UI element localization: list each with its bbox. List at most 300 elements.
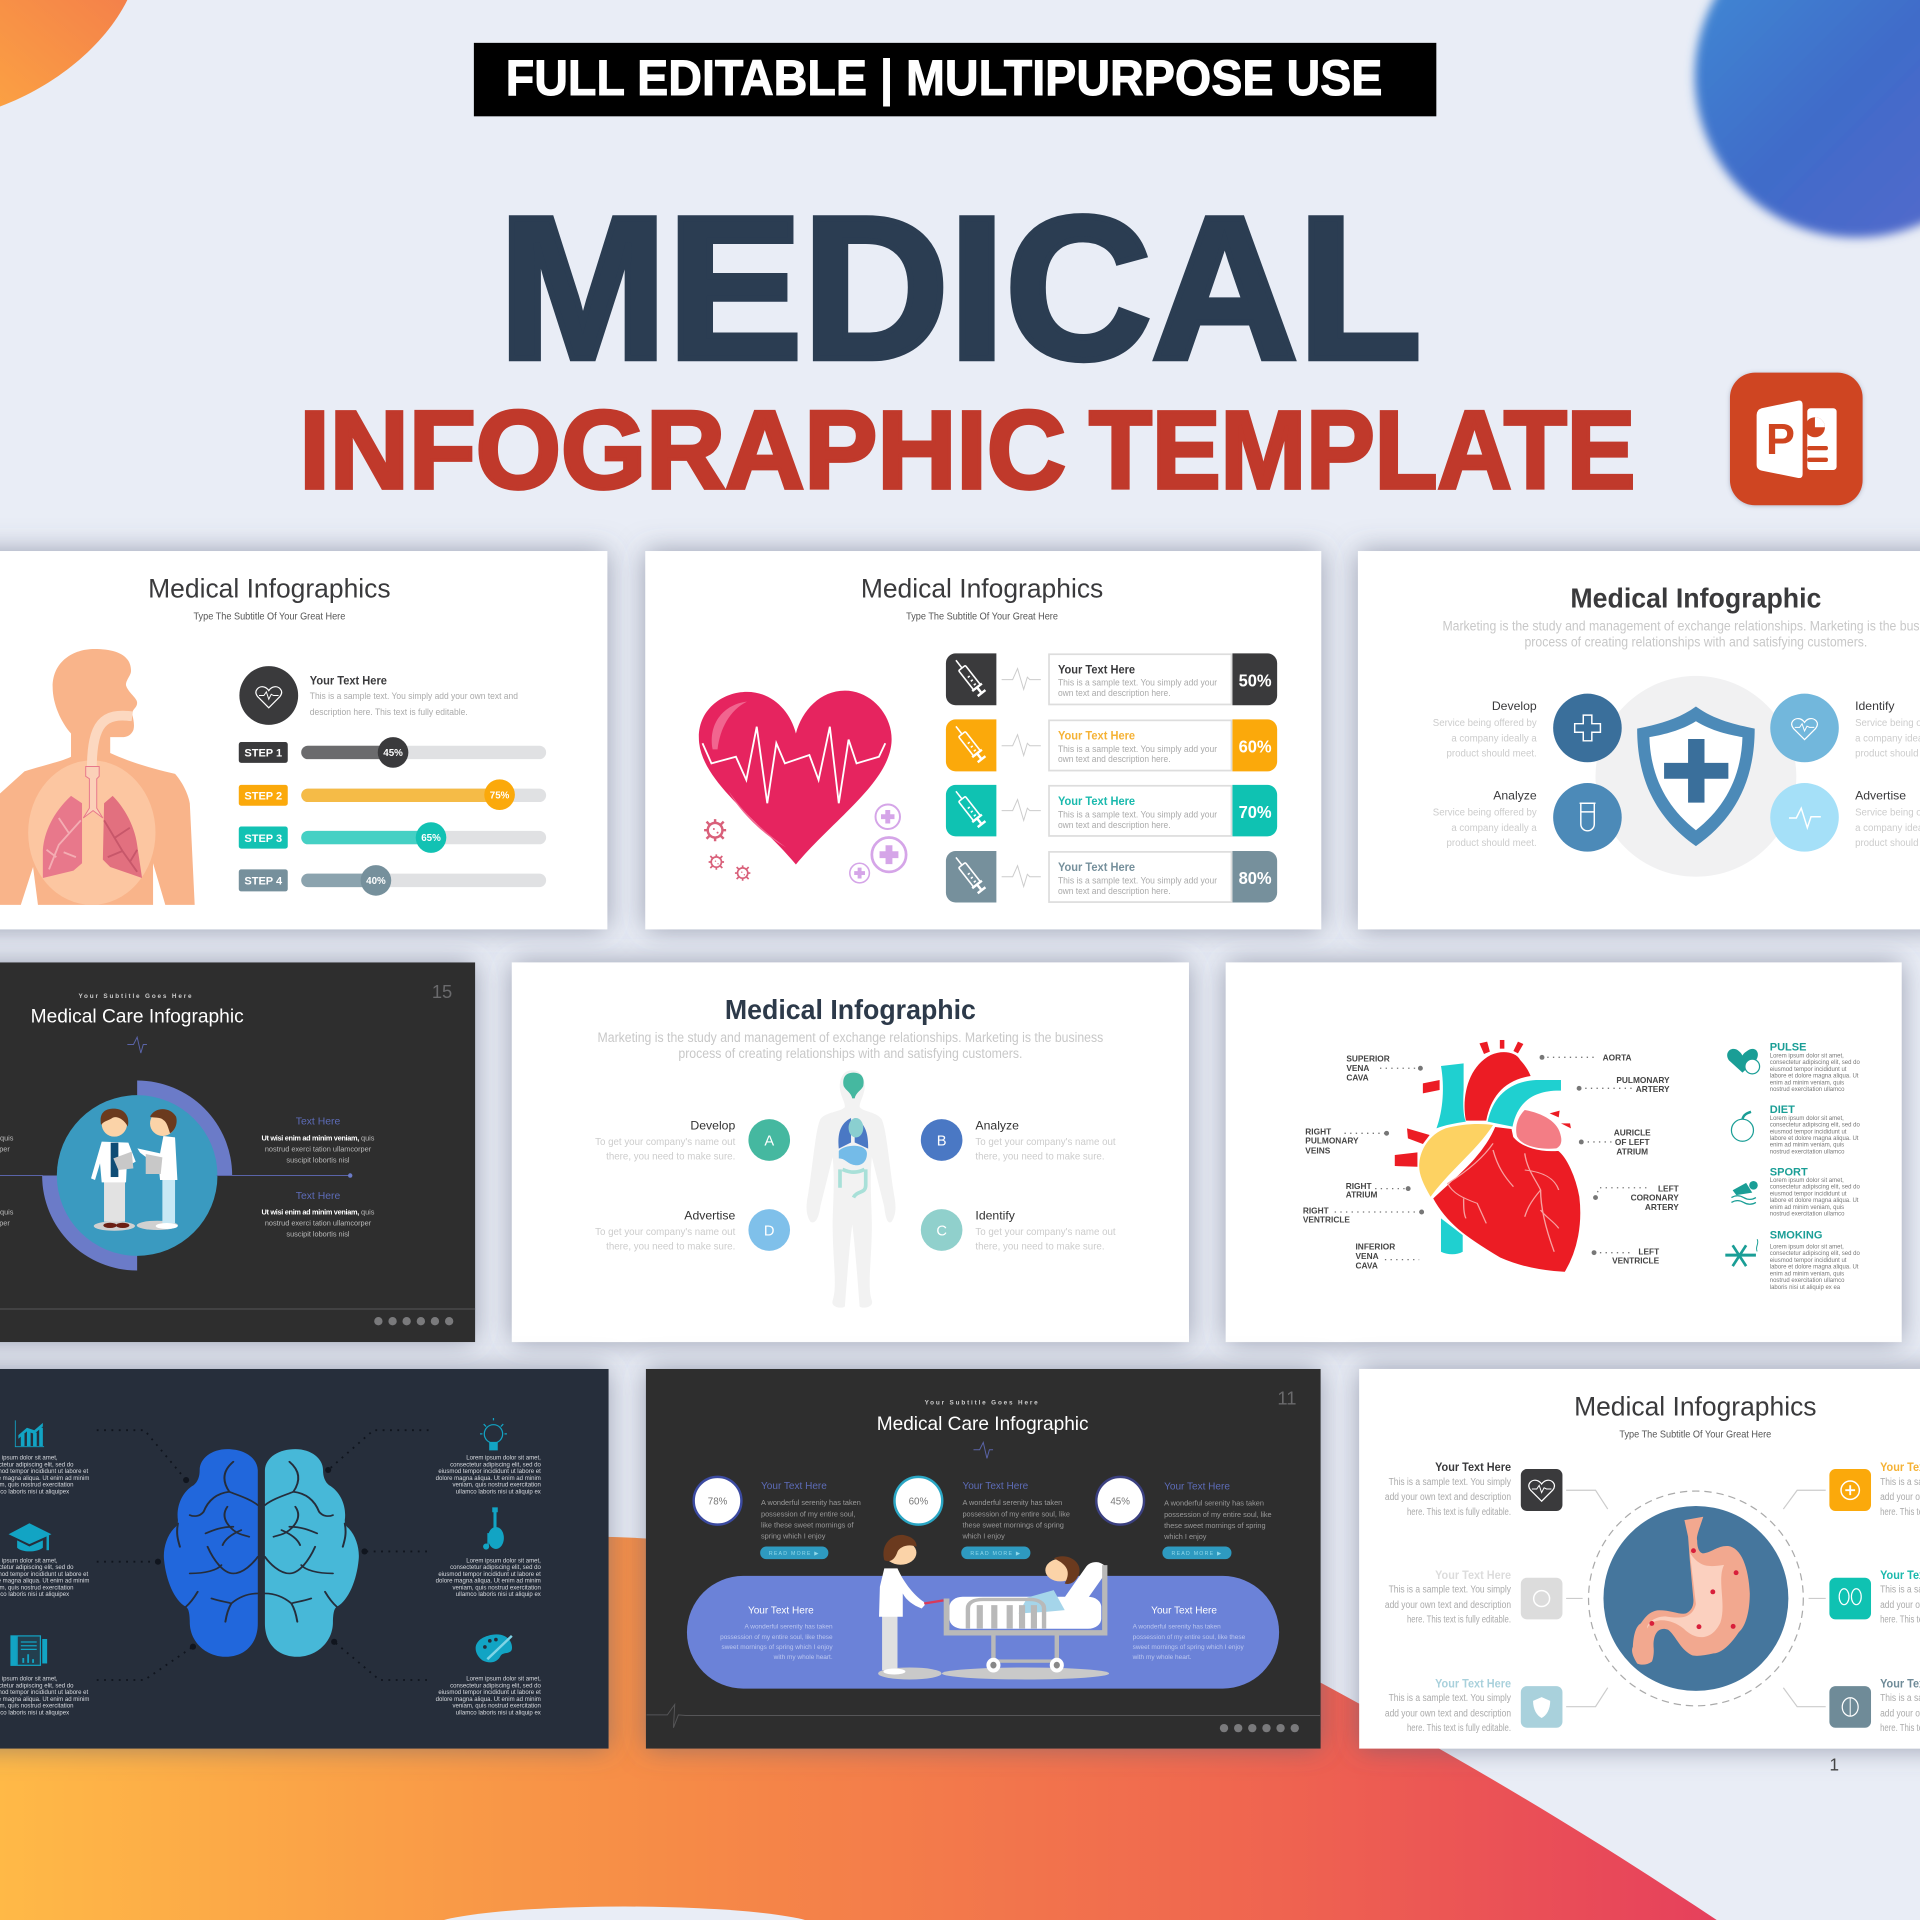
icon: pulse xyxy=(973,1442,993,1458)
text column 2: these sweet mornings of spring xyxy=(962,1521,1064,1530)
row: 70% xyxy=(946,785,1277,836)
text: develop: Develop xyxy=(690,1119,735,1133)
icon: palette xyxy=(476,1634,512,1662)
text: analyze xyxy=(1433,789,1537,849)
text: develop: a company ideally a xyxy=(1451,733,1537,744)
icon tile: kidneys xyxy=(1829,1578,1871,1619)
text: right top: Ut wisi enim ad minim veniam, quis xyxy=(262,1134,375,1143)
banner: FULL EDITABLE | MULTIPURPOSE USE xyxy=(506,50,1382,107)
pill text right: possession of my entire soul, like these xyxy=(1133,1634,1246,1641)
circle: C xyxy=(921,1209,962,1251)
icon: chart xyxy=(15,1420,44,1447)
heart labels: RIGHT xyxy=(1305,1126,1331,1136)
heart label leader dots xyxy=(1335,1057,1651,1260)
text: right column 1: Lorem ipsum dolor sit amet, xyxy=(466,1456,541,1462)
text column 3 xyxy=(1163,1482,1272,1541)
progress: step 4: 40% xyxy=(366,876,386,887)
heart labels: VENTRICLE xyxy=(1612,1256,1660,1266)
text column 1: spring which I enjoy xyxy=(761,1532,826,1541)
text: sport: consectetur adipiscing elit, sed do xyxy=(1770,1185,1860,1191)
text: pulse: nostrud exercitation ullamco xyxy=(1770,1087,1845,1093)
text: right bottom: nostrud exerci tation ullamcorper xyxy=(265,1219,372,1228)
text: sport: nostrud exercitation ullamco xyxy=(1770,1212,1845,1218)
text: analyze: there, you need to make sure. xyxy=(975,1152,1105,1163)
footer pulse line xyxy=(647,1704,1320,1728)
text: analyze: a company ideally a xyxy=(1451,823,1537,834)
text: smoking: SMOKING xyxy=(1770,1230,1822,1242)
text: right column 1: ullamco laboris nisi ut aliquip ex xyxy=(456,1489,541,1495)
text: diet: enim ad minim veniam, quis xyxy=(1770,1143,1844,1149)
decorative orange blob top left xyxy=(0,0,127,107)
text: pulse: eiusmod tempor incididunt ut xyxy=(1770,1067,1847,1073)
pill text left: A wonderful serenity has taken xyxy=(745,1624,833,1631)
page number below panel: 1 xyxy=(1830,1755,1839,1775)
circle: C: C xyxy=(936,1224,947,1240)
heart labels xyxy=(1303,1052,1679,1271)
icon: heart circle xyxy=(239,666,298,725)
heart labels: PULMONARY xyxy=(1305,1136,1359,1146)
icon: powerpoint: P xyxy=(1766,416,1795,464)
connector line xyxy=(0,1173,352,1178)
pill text left: sweet mornings of spring which I enjoy xyxy=(722,1644,833,1651)
text: diet: Lorem ipsum dolor sit amet, xyxy=(1770,1116,1844,1122)
text: smoking: Lorem ipsum dolor sit amet, xyxy=(1770,1244,1844,1250)
heart labels: CORONARY xyxy=(1631,1193,1679,1203)
heart labels: ATRIUM xyxy=(1616,1147,1648,1157)
text column 3: A wonderful serenity has taken xyxy=(1164,1499,1264,1508)
circle: A xyxy=(748,1119,790,1161)
icon: guitar xyxy=(483,1507,504,1550)
decorative light curve bottom xyxy=(429,1907,820,1920)
text column 2 xyxy=(961,1481,1070,1541)
text: identify: Identify xyxy=(975,1209,1016,1223)
panel title: Medical Infographics xyxy=(861,574,1103,604)
icon: pulse xyxy=(127,1037,147,1053)
button 1: READ MORE ▶ xyxy=(769,1551,820,1557)
progress: 45% xyxy=(1096,1477,1144,1525)
text: analyze: product should meet. xyxy=(1447,838,1537,849)
panel: brain xyxy=(0,1369,609,1749)
text: right top xyxy=(262,1117,375,1165)
text: right column 2: consectetur adipiscing elit, sed do xyxy=(450,1565,541,1571)
panel subtitle: Type The Subtitle Of Your Great Here xyxy=(1619,1430,1771,1441)
heart labels: INFERIOR xyxy=(1356,1242,1395,1252)
icon tile: heart xyxy=(1521,1469,1562,1511)
text: right column 1: dolore magna aliqua. Ut enim ad minim xyxy=(436,1476,541,1482)
text: develop xyxy=(1433,699,1537,760)
progress: step 2 xyxy=(239,779,546,810)
illustration: anatomical heart xyxy=(1395,1040,1581,1273)
heart labels: LEFT xyxy=(1638,1246,1659,1256)
text: left middle: add your own text and description xyxy=(1385,1600,1511,1611)
row: 50%: Your Text Here xyxy=(1058,662,1135,676)
text column 2: A wonderful serenity has taken xyxy=(962,1498,1062,1507)
text: pulse: PULSE xyxy=(1770,1042,1806,1054)
text: left middle: Your Text Here xyxy=(1435,1568,1511,1582)
pill text left xyxy=(720,1605,833,1661)
circle: B xyxy=(921,1119,962,1161)
text: left top xyxy=(1385,1460,1511,1518)
text: left column 3 xyxy=(0,1677,89,1716)
text: left bottom: add your own text and description xyxy=(1385,1708,1511,1719)
text: clipped left: quis xyxy=(0,1134,14,1143)
text column 3: which I enjoy xyxy=(1163,1532,1207,1541)
progress: 78% xyxy=(694,1477,741,1525)
heart labels: OF LEFT xyxy=(1615,1137,1650,1147)
pill text right: A wonderful serenity has taken xyxy=(1133,1624,1221,1631)
text: right column 2: Lorem ipsum dolor sit amet, xyxy=(466,1558,541,1564)
icon: light bulb xyxy=(480,1418,507,1450)
text: right top xyxy=(1880,1460,1920,1518)
text: right column 1 xyxy=(436,1456,541,1495)
text: right column 2: veniam, quis nostrud exercitation xyxy=(452,1585,541,1591)
panel description xyxy=(1442,619,1920,650)
progress: step 1: STEP 1 xyxy=(244,748,282,760)
decorative gradient wave bottom xyxy=(0,1536,1717,1920)
text: right column 3: veniam, quis nostrud exercitation xyxy=(452,1704,541,1710)
icon: powerpoint xyxy=(1730,373,1863,505)
panel: shield xyxy=(1358,551,1920,929)
text: identify: Identify xyxy=(1855,699,1895,713)
row: 60%: own text and description here. xyxy=(1058,754,1171,764)
text: sport xyxy=(1770,1167,1860,1218)
text: develop: To get your company's name out xyxy=(595,1137,736,1148)
icon: graduation cap xyxy=(9,1523,51,1551)
panel description: Marketing is the study and management of exchange relationships. Marketing is the business xyxy=(598,1030,1104,1045)
text column 1: A wonderful serenity has taken xyxy=(761,1498,861,1507)
icon: diet xyxy=(1731,1112,1753,1141)
circle: A: A xyxy=(764,1134,774,1150)
button 1 xyxy=(760,1547,828,1559)
subtitle: infographic template: TEMPLATE xyxy=(1089,389,1635,512)
text: right column 1: veniam, quis nostrud exercitation xyxy=(452,1483,541,1489)
text: left bottom: This is a sample text. You simply xyxy=(1389,1693,1511,1704)
row: 60%: This is a sample text. You simply add your xyxy=(1058,744,1217,754)
progress: 78%: 78% xyxy=(708,1496,728,1507)
text: diet xyxy=(1770,1104,1860,1155)
panel title: Medical Infographic xyxy=(1570,582,1821,613)
text: left column 1 xyxy=(0,1456,89,1495)
panel: anatomical heart xyxy=(1226,962,1902,1342)
text: pulse: labore et dolore magna aliqua. Ut xyxy=(1770,1074,1859,1080)
heart labels: ATRIUM xyxy=(1346,1190,1377,1200)
progress: step 1 xyxy=(239,737,546,768)
text: right bottom: Ut wisi enim ad minim veniam, quis xyxy=(262,1208,375,1217)
pill text right: with my whole heart. xyxy=(1132,1654,1192,1661)
text: right top: Text Here xyxy=(296,1117,340,1128)
social icons xyxy=(1220,1724,1299,1732)
text: sport: Lorem ipsum dolor sit amet, xyxy=(1770,1178,1844,1184)
text: left middle xyxy=(1385,1568,1511,1626)
icon: analyze xyxy=(1553,783,1622,852)
text: right column 2: dolore magna aliqua. Ut enim ad minim xyxy=(436,1579,541,1585)
text: right column 2 xyxy=(436,1558,541,1598)
text: smoking: nostrud exercitation ullamco xyxy=(1770,1278,1845,1284)
pill text right: Your Text Here xyxy=(1151,1605,1217,1616)
text column 1: possession of my entire soul, xyxy=(761,1509,856,1518)
text: right bottom xyxy=(262,1191,375,1239)
text: right top: nostrud exerci tation ullamcorper xyxy=(265,1145,372,1154)
text: analyze: To get your company's name out xyxy=(975,1137,1116,1148)
text: left bottom: Your Text Here xyxy=(1435,1676,1511,1690)
text: sport: eiusmod tempor incididunt ut xyxy=(1770,1191,1847,1197)
panel subtitle: Type The Subtitle Of Your Great Here xyxy=(906,612,1058,623)
text: sport: SPORT xyxy=(1770,1167,1808,1179)
text: smoking xyxy=(1770,1230,1860,1291)
text: diet: consectetur adipiscing elit, sed do xyxy=(1770,1123,1860,1129)
text: identify: there, you need to make sure. xyxy=(975,1242,1105,1253)
row: 50%: own text and description here. xyxy=(1058,688,1171,698)
row: 50%: This is a sample text. You simply add your xyxy=(1058,678,1217,688)
panel: body organs xyxy=(512,962,1189,1342)
text: right column 3: eiusmod tempor incididunt ut labore et xyxy=(438,1690,541,1696)
leader dots xyxy=(97,1430,429,1680)
text: right column 3: dolore magna aliqua. Ut enim ad minim xyxy=(436,1697,541,1703)
page number: 11 xyxy=(1277,1387,1296,1408)
heart labels: CAVA xyxy=(1346,1073,1369,1083)
pill text left: possession of my entire soul, like these xyxy=(720,1634,833,1641)
heart labels: ARTERY xyxy=(1636,1084,1670,1094)
icon: pulse xyxy=(1727,1049,1760,1074)
panel: lungs steps xyxy=(0,551,607,929)
text: left top: Your Text Here xyxy=(1435,1460,1511,1474)
text: right bottom xyxy=(1880,1676,1920,1734)
pill text left: Your Text Here xyxy=(748,1605,814,1616)
text: right column 3: ullamco laboris nisi ut aliquip ex xyxy=(456,1710,541,1716)
circle: D: D xyxy=(764,1224,775,1240)
text: develop xyxy=(595,1119,736,1163)
text: left top: This is a sample text. You simply xyxy=(1389,1477,1511,1488)
text: right bottom: Text Here xyxy=(296,1191,340,1202)
text: advertise: Advertise xyxy=(1855,789,1906,803)
button 2 xyxy=(961,1547,1030,1559)
text column 1: like these sweet mornings of xyxy=(761,1521,854,1530)
row: 70%: Your Text Here xyxy=(1058,794,1135,808)
icon tile: shield xyxy=(1521,1686,1562,1728)
text: left bottom: here. This text is fully editable. xyxy=(1407,1723,1511,1734)
text: advertise xyxy=(1855,789,1920,849)
row: 80%: Your Text Here xyxy=(1058,860,1135,874)
heart labels: CAVA xyxy=(1356,1261,1378,1271)
text: develop: Service being offered by xyxy=(1433,718,1537,729)
illustration: doctor and patient xyxy=(878,1535,1110,1679)
text column 3: Your Text Here xyxy=(1164,1482,1230,1493)
text: left top: here. This text is fully editable. xyxy=(1407,1507,1511,1518)
text: right column 3 xyxy=(436,1677,541,1716)
text: your text here: This is a sample text. You simply add your own text and xyxy=(310,691,518,701)
row: 80%: 80% xyxy=(1239,868,1272,888)
text: left middle: This is a sample text. You simply xyxy=(1389,1585,1511,1596)
text: advertise: there, you need to make sure. xyxy=(606,1242,735,1253)
button 3 xyxy=(1162,1547,1231,1559)
text: right column 3: consectetur adipiscing elit, sed do xyxy=(450,1683,541,1689)
text: pulse: consectetur adipiscing elit, sed do xyxy=(1770,1060,1860,1066)
heart labels: LEFT xyxy=(1658,1183,1679,1193)
pill text right xyxy=(1132,1605,1246,1661)
heart labels: VEINS xyxy=(1305,1145,1331,1155)
progress: step 2: 75% xyxy=(490,790,510,801)
heart labels: AORTA xyxy=(1603,1052,1632,1062)
row: 60% xyxy=(946,719,1277,771)
text: analyze: Service being offered by xyxy=(1433,808,1537,819)
progress: step 4: STEP 4 xyxy=(244,876,283,888)
text: advertise: Advertise xyxy=(684,1209,736,1223)
circle: B: B xyxy=(937,1134,947,1150)
panel subtitle: Your Subtitle Goes Here xyxy=(78,993,193,1000)
heart labels: ARTERY xyxy=(1645,1202,1679,1212)
row: 80%: own text and description here. xyxy=(1058,886,1171,896)
title: MEDICAL: MEDICAL xyxy=(498,175,1422,402)
text column 2: possession of my entire soul, like xyxy=(962,1509,1070,1518)
text: advertise xyxy=(595,1209,736,1253)
circle: D xyxy=(748,1209,790,1251)
text: analyze: Analyze xyxy=(975,1119,1019,1133)
text: diet: DIET xyxy=(1770,1104,1795,1116)
text: smoking: consectetur adipiscing elit, sed do xyxy=(1770,1251,1860,1257)
text column 1: Your Text Here xyxy=(761,1481,827,1492)
icon: advertise xyxy=(1770,783,1839,852)
panel title: Medical Infographics xyxy=(148,574,391,604)
heart labels: PULMONARY xyxy=(1616,1075,1670,1085)
heart labels: AURICLE xyxy=(1614,1128,1651,1138)
row: 60%: Your Text Here xyxy=(1058,729,1135,743)
text: identify xyxy=(1855,699,1920,760)
heart labels: VENTRICLE xyxy=(1303,1215,1350,1225)
text column 2: Your Text Here xyxy=(962,1481,1029,1492)
illustration: stomach in circle xyxy=(1589,1491,1803,1706)
text: diet: nostrud exercitation ullamco xyxy=(1770,1149,1845,1155)
text: your text here: description here. This text is fully editable. xyxy=(310,707,468,717)
panel description: process of creating relationships with and satisfying customers. xyxy=(678,1046,1022,1061)
text: right top: suscipit lobortis nisl xyxy=(286,1156,350,1165)
illustration: doctors in circle xyxy=(42,1080,232,1271)
connectors xyxy=(1566,1490,1826,1707)
row: 80% xyxy=(946,851,1277,902)
text: analyze xyxy=(975,1119,1116,1163)
text: your text here xyxy=(310,673,518,717)
text: left column 2 xyxy=(0,1558,89,1598)
text: smoking: enim ad minim veniam, quis xyxy=(1770,1271,1844,1277)
text: your text here: Your Text Here xyxy=(310,673,387,687)
panel description: process of creating relationships with and satisfying customers. xyxy=(1524,635,1867,650)
progress: step 2: STEP 2 xyxy=(244,791,282,803)
panel title: Medical Care Infographic xyxy=(31,1005,244,1027)
icon tile: head xyxy=(1521,1578,1562,1619)
illustration: brain xyxy=(164,1449,359,1657)
text: advertise: To get your company's name out xyxy=(595,1227,736,1238)
button 2: READ MORE ▶ xyxy=(970,1551,1021,1557)
row: 50% xyxy=(946,653,1277,705)
text: right bottom: suscipit lobortis nisl xyxy=(286,1230,350,1239)
text: pulse: Lorem ipsum dolor sit amet, xyxy=(1770,1053,1844,1059)
icon: smoking xyxy=(1725,1239,1758,1266)
icon: clipboard xyxy=(11,1636,47,1665)
pill background xyxy=(687,1576,1279,1689)
social icons xyxy=(374,1317,453,1325)
text: identify xyxy=(975,1209,1116,1253)
progress: step 3: 65% xyxy=(421,833,441,844)
text: left top: add your own text and description xyxy=(1385,1492,1511,1503)
panel: medical care patient xyxy=(646,1369,1321,1749)
icon tile: plus xyxy=(1829,1469,1871,1511)
illustration: human body organs xyxy=(807,1070,895,1308)
heart labels: RIGHT xyxy=(1346,1181,1372,1191)
panel: medical care doctors xyxy=(0,962,475,1342)
icon: sport xyxy=(1731,1181,1758,1204)
text: pulse: enim ad minim veniam, quis xyxy=(1770,1080,1844,1086)
text: develop: there, you need to make sure. xyxy=(606,1152,735,1163)
text: right column 1: eiusmod tempor incididunt ut labore et xyxy=(438,1469,541,1475)
text column 3: possession of my entire soul, like xyxy=(1164,1510,1272,1519)
heart labels: SUPERIOR xyxy=(1346,1054,1390,1064)
text: pulse xyxy=(1770,1042,1860,1093)
row: 70%: own text and description here. xyxy=(1058,820,1171,830)
heart labels: VENA xyxy=(1356,1251,1379,1261)
icon: identify xyxy=(1770,694,1839,762)
text column 2: which I enjoy xyxy=(961,1532,1005,1541)
text: right column 3: Lorem ipsum dolor sit amet, xyxy=(466,1677,541,1683)
pill text right: sweet mornings of spring which I enjoy xyxy=(1133,1644,1245,1651)
icon tile: brain xyxy=(1829,1686,1871,1728)
text: analyze: Analyze xyxy=(1493,789,1537,803)
progress: 60% xyxy=(894,1477,942,1525)
text: smoking: laboris nisi ut aliquip ex ea xyxy=(1770,1285,1841,1291)
row: 60%: 60% xyxy=(1239,736,1272,756)
page number: 15 xyxy=(432,981,452,1002)
button 3: READ MORE ▶ xyxy=(1172,1551,1222,1557)
row: 80%: This is a sample text. You simply add your xyxy=(1058,875,1217,885)
panel: stomach xyxy=(1359,1369,1920,1749)
icon: develop xyxy=(1553,694,1622,762)
decorative blue circle top right xyxy=(1695,0,1920,238)
row: 70%: 70% xyxy=(1239,802,1272,822)
progress: step 3 xyxy=(239,822,546,853)
text column 1 xyxy=(761,1481,861,1541)
text: develop: Develop xyxy=(1492,699,1537,713)
text: diet: labore et dolore magna aliqua. Ut xyxy=(1770,1136,1859,1142)
heart labels: RIGHT xyxy=(1303,1205,1329,1215)
text: right column 2: ullamco laboris nisi ut aliquip ex xyxy=(456,1592,541,1598)
illustration: heart with pulse xyxy=(699,691,906,883)
panel description xyxy=(598,1030,1104,1061)
progress: step 3: STEP 3 xyxy=(244,833,282,845)
subtitle: infographic template: INFOGRAPHIC xyxy=(299,389,1066,512)
panel title: Medical Infographics xyxy=(1574,1392,1817,1422)
illustration: human torso with lungs xyxy=(0,649,195,905)
text: left middle: here. This text is fully editable. xyxy=(1407,1615,1511,1626)
progress: 60%: 60% xyxy=(909,1496,928,1507)
text: left bottom xyxy=(1385,1676,1511,1734)
text: sport: enim ad minim veniam, quis xyxy=(1770,1205,1844,1211)
row: 50%: 50% xyxy=(1239,670,1272,690)
panel title: Medical Care Infographic xyxy=(877,1413,1089,1435)
text: identify: To get your company's name out xyxy=(975,1227,1116,1238)
text: develop: product should meet. xyxy=(1447,749,1537,760)
panel: heart syringes xyxy=(645,551,1321,929)
progress: 45%: 45% xyxy=(1110,1496,1130,1507)
text column 3: these sweet mornings of spring xyxy=(1164,1521,1266,1530)
progress: step 4 xyxy=(239,865,546,896)
row: 70%: This is a sample text. You simply add your xyxy=(1058,809,1217,819)
text: right column 1: consectetur adipiscing elit, sed do xyxy=(450,1462,541,1468)
text: smoking: labore et dolore magna aliqua. Ut xyxy=(1770,1265,1859,1271)
text: smoking: eiusmod tempor incididunt ut xyxy=(1770,1258,1847,1264)
text: right middle xyxy=(1880,1568,1920,1626)
text: clipped left: quis xyxy=(0,1208,14,1217)
panel subtitle: Type The Subtitle Of Your Great Here xyxy=(193,612,345,623)
panel subtitle: Your Subtitle Goes Here xyxy=(925,1399,1040,1406)
text: clipped left xyxy=(0,1134,14,1228)
